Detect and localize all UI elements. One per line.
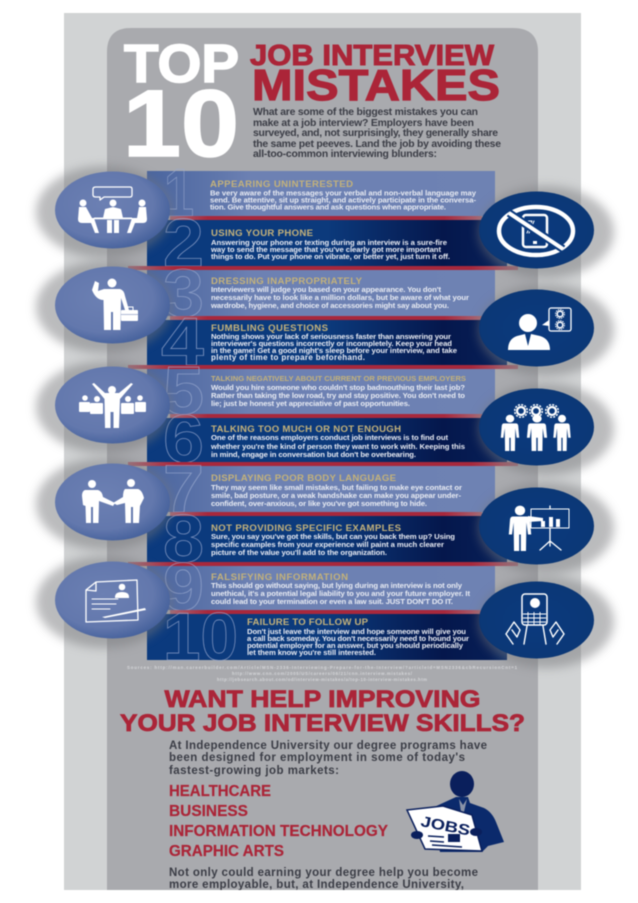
icon: no phone [478, 186, 614, 278]
panel: mistake 3: wardrobe, hygiene, and choice of accessories might say about you. [210, 301, 449, 310]
divider [128, 365, 518, 369]
panel: mistake 6: One of the reasons employers conduct job interviews is to find out [211, 433, 448, 442]
panel: mistake 8: 8 [163, 501, 204, 577]
panel: mistake 1: Be very aware of the messages your verbal and non-verbal language may [210, 188, 477, 198]
panel: mistake 7: DISPLAYING POOR BODY LANGUAGE [211, 473, 397, 484]
panel: mistake 8: Sure, you say you've got the skills, but can you back them up? Using [211, 532, 455, 541]
paragraph: closing text: Not only could earning your degree help you become [169, 867, 478, 879]
title: Top 10 [123, 34, 239, 177]
outer light panel [64, 13, 581, 890]
sources: http://www.cnn.com/2005/US/careers/06/21/cnn.interview.mistakes/ [232, 671, 413, 676]
panel: mistake 4: 4 [161, 304, 204, 380]
panel: mistake 1: 1 [164, 155, 194, 231]
panel: mistake 6: 6 [163, 401, 204, 477]
title: Top 10: TOP [124, 34, 239, 94]
title: Top 10: 10 [123, 71, 239, 177]
panel: mistake 2: 2 [163, 205, 204, 281]
panel: mistake 3: DRESSING INAPPROPRIATELY [211, 276, 363, 287]
panel: mistake 10: a call back someday. You don't necessarily need to hound your [247, 634, 469, 643]
divider [170, 216, 482, 220]
panel: mistake 2: way to send the message that you've clearly got more important [210, 245, 441, 254]
panel: mistake 9: 9 [163, 549, 204, 625]
title: Job Interview Mistakes: MISTAKES [252, 61, 500, 110]
icon: team with gears [478, 383, 614, 475]
panel: mistake 4: Nothing shows your lack of seriousness faster than answering your [211, 332, 451, 341]
list of job markets: INFORMATION TECHNOLOGY [169, 823, 389, 840]
icon: man reading jobs newspaper: JOBS [419, 813, 472, 839]
intro text: the same pet peeves. Land the job by avoiding these [253, 139, 501, 150]
panel: mistake 9: FALSIFYING INFORMATION [211, 572, 348, 583]
inner gray panel [107, 28, 538, 890]
sources [127, 665, 518, 682]
panel: mistake 9: unethical, it's a potential legal liability to you and your future employer. It [211, 589, 470, 598]
intro text: surveyed, and, not surprisingly, they generally share [253, 128, 498, 139]
paragraph: degree programs: At Independence University our degree programs have [169, 740, 487, 752]
list of job markets: HEALTHCARE [169, 783, 271, 800]
panel: mistake 5: lie; just be honest yet appreciative of past opportunities. [211, 399, 410, 408]
panel: mistake 7: smile, bad posture, or a weak handshake can make you appear under- [211, 491, 461, 500]
heading: want help [120, 686, 525, 737]
panel: mistake 10: 10 [163, 599, 238, 675]
panel: mistake 2: things to do. Put your phone on vibrate, or better yet, just turn it off. [211, 252, 450, 261]
bottom mask [0, 890, 638, 903]
panel: mistake 5: TALKING NEGATIVELY ABOUT CURRENT OR PREVIOUS EMPLOYERS [211, 374, 466, 383]
panel: mistake 1 [147, 155, 495, 231]
sources: Sources: http://man.careerbuilder.com/Article/MSN-2336-Interviewing-Prepare-for-the-Interview/?articleId=MSN2336&cbRecursionCnt=1 [127, 665, 518, 670]
panel: mistake 5: 5 [163, 353, 204, 429]
panel: mistake 7: confident, over-anxious, or like you've got something to hide. [211, 499, 427, 508]
divider [128, 562, 518, 566]
divider [170, 512, 482, 516]
panel: mistake 5: Rather than taking the low road, try and stay positive. You don't need to [211, 391, 465, 400]
panel: mistake 4: FUMBLING QUESTIONS [211, 323, 329, 334]
intro text [253, 107, 501, 160]
paragraph: closing text [169, 867, 478, 891]
panel: mistake 10: Don't just leave the interview and hope someone will give you [247, 627, 466, 636]
list of job markets [169, 783, 389, 860]
panel: mistake 8 [147, 501, 507, 577]
icon: presenter at chart [478, 482, 614, 574]
panel: mistake 9: This should go without saying, but lying during an interview is not only [211, 581, 463, 590]
icon: resume document [36, 556, 172, 648]
panel: mistake 3: 3 [163, 255, 204, 331]
icon: person with thought gears [478, 284, 614, 376]
paragraph: degree programs [169, 740, 487, 777]
panel: mistake 6: in mind, engage in conversation but don't be overbearing. [211, 450, 416, 459]
panel: mistake 1: tion. Give thoughtful answers and ask questions when appropriate. [210, 202, 446, 212]
paragraph: closing text: more employable, but, at Independence University, [169, 879, 464, 891]
divider [170, 610, 482, 614]
panel: mistake 6: whether you're the kind of person they want to work with. Keeping this [210, 442, 465, 451]
intro text: make at a job interview? Employers have been [253, 118, 474, 129]
divider [128, 266, 518, 270]
panel: mistake 4: in the game! Get a good night's sleep before your interview, and take [211, 346, 458, 355]
panel: mistake 10: FAILURE TO FOLLOW UP [247, 617, 369, 628]
panel: mistake 8: NOT PROVIDING SPECIFIC EXAMPLES [211, 523, 402, 534]
panel: mistake 7: 7 [163, 451, 204, 527]
panel: mistake 10: potential employer for an answer, but you should periodically [247, 641, 464, 650]
panel: mistake 7: They may seem like small mistakes, but failing to make eye contact or [211, 483, 462, 492]
panel: mistake 6 [147, 401, 507, 477]
icon: man reading jobs newspaper [407, 771, 504, 852]
panel: mistake 8: specific examples from your experience will paint a much clearer [211, 540, 444, 549]
panel: mistake 7 [147, 451, 495, 527]
panel: mistake 4: plenty of time to prepare beforehand. [211, 353, 365, 362]
panel: mistake 10 [147, 599, 507, 675]
heading: want help: WANT HELP IMPROVING [164, 686, 480, 713]
panel: mistake 5 [147, 353, 495, 429]
paragraph: degree programs: been designed for employment in some of today's [169, 752, 465, 764]
divider [128, 462, 518, 466]
intro text: all-too-common interviewing blunders: [253, 149, 437, 160]
panel: mistake 4 [147, 304, 507, 380]
title: Job Interview Mistakes [250, 40, 500, 110]
panel: mistake 3 [147, 255, 495, 331]
divider [170, 316, 482, 320]
panel: mistake 3: Interviewers will judge you based on your appearance. You don't [211, 285, 441, 294]
heading: want help: YOUR JOB INTERVIEW SKILLS? [120, 710, 525, 737]
icon: hands holding phone [478, 576, 614, 668]
panel: mistake 9: could lead to your termination or even a law suit. JUST DON'T DO IT. [211, 597, 453, 606]
icon: leader with team [36, 361, 172, 453]
list of job markets: BUSINESS [169, 803, 248, 820]
icon: handshake [36, 458, 172, 550]
sources: http://jobsearch.about.com/od/interview-mistakes/a/top-10-interview-mistakes.htm [217, 677, 427, 682]
panel: mistake 10: let them know you're still interested. [247, 648, 376, 657]
panel: mistake 4: interviewer's questions incorrectly or incompletely. Keep your head [211, 339, 452, 348]
panel: mistake 2: USING YOUR PHONE [211, 228, 314, 239]
paragraph: degree programs: fastest-growing job markets: [169, 765, 339, 777]
divider [170, 414, 482, 418]
panel: mistake 5: Would you hire someone who couldn't stop badmouthing their last job? [211, 383, 465, 392]
title: Job Interview Mistakes: JOB INTERVIEW [250, 40, 494, 72]
intro text: What are some of the biggest mistakes you can [253, 107, 478, 118]
panel: mistake 1: send. Be attentive, sit up straight, and actively participate in the conversa- [210, 196, 476, 204]
panel: mistake 6: TALKING TOO MUCH OR NOT ENOUGH [211, 424, 401, 435]
list of job markets: GRAPHIC ARTS [169, 843, 284, 860]
icon: man with briefcase [36, 261, 172, 353]
panel: mistake 2: Answering your phone or texting during an interview is a sure-fire [211, 238, 448, 247]
panel: mistake 9 [147, 549, 495, 625]
panel: mistake 1: APPEARING UNINTERESTED [210, 179, 353, 190]
panel: mistake 8: picture of the value you'll add to the organization. [211, 548, 387, 557]
panel: mistake 2 [147, 205, 507, 281]
panel: mistake 3: necessarily have to look like a million dollars, but be aware of what your [211, 293, 469, 302]
icon: meeting at table [36, 166, 172, 258]
